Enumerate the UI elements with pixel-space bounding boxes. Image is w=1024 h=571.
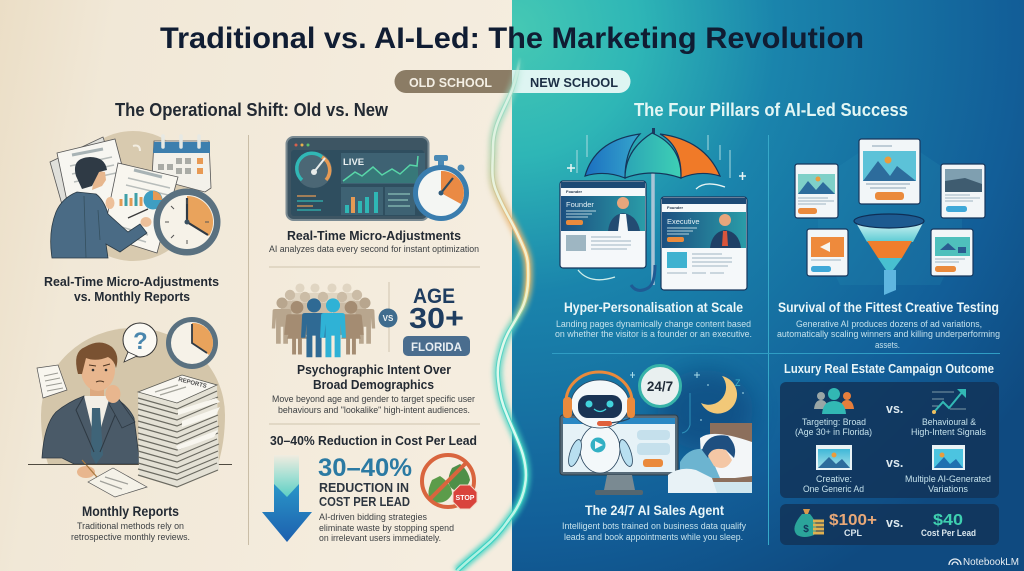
vs badge: VS <box>383 314 394 323</box>
panel: targeting and creative comparison: (Age 30+ in Florida) <box>795 427 872 437</box>
text: psychographic intent <box>272 362 475 415</box>
text: real-time vs monthly reports <box>44 274 219 304</box>
ad card: right <box>941 164 985 218</box>
icon: money bag and coins: $ <box>803 524 809 535</box>
text: monthly reports: Traditional methods rely on <box>77 521 184 531</box>
text: ai-driven bidding: on irrelevant users immediately. <box>319 533 441 543</box>
text: ai-driven bidding: eliminate waste by stopping spend <box>319 523 454 533</box>
panel: cost per lead comparison: $40 <box>933 512 963 529</box>
text: hyper-personalisation: Landing pages dynamically change content based <box>556 319 751 329</box>
icon: live dashboard with stopwatch <box>286 137 469 221</box>
age 30+ florida label: 30+ <box>409 303 464 335</box>
panel: cost per lead comparison <box>780 504 999 545</box>
panel: cost per lead comparison: Cost Per Lead <box>921 528 976 538</box>
sleeping person <box>668 423 752 493</box>
panel: targeting and creative comparison: Creative: <box>816 474 852 484</box>
panel: cost per lead comparison: vs. <box>886 516 903 530</box>
icon: money bag and coins <box>794 509 824 537</box>
live chart <box>341 153 425 184</box>
browser: founder: Founder <box>566 200 594 209</box>
icon: ai robot sales agent and sleeping person: Z <box>735 378 741 388</box>
panel: targeting and creative comparison: One Generic Ad <box>803 484 864 494</box>
icon: rising chart <box>932 389 966 414</box>
text: real-time micro-adjustments: Real-Time Micro-Adjustments <box>287 228 461 243</box>
text: 24/7 sales agent <box>562 503 746 542</box>
icon: people <box>814 388 854 414</box>
icon: man reviewing reports with clock and calendar <box>50 131 220 261</box>
monitor <box>560 415 678 495</box>
loose document <box>37 365 67 398</box>
old school pill: OLD SCHOOL <box>409 75 492 90</box>
robot <box>563 372 635 473</box>
gauge <box>296 152 332 188</box>
heading: four pillars: The Four Pillars of AI-Led Success <box>634 100 908 120</box>
paper stack <box>138 375 220 487</box>
text: ai-driven bidding <box>319 512 454 543</box>
title: Traditional vs. AI-Led: The Marketing Revolution <box>160 22 864 55</box>
browser: executive <box>661 197 747 290</box>
icon: generic ad image <box>816 445 852 470</box>
24/7 clock: 24/7 <box>647 379 673 394</box>
text: monthly reports: retrospective monthly reviews. <box>71 532 190 542</box>
text: psychographic intent: Move beyond age and gender to target specific user <box>272 394 475 404</box>
browser: executive: Founder <box>667 205 683 210</box>
icon: no money stop sign: STOP <box>456 495 475 502</box>
panel: targeting and creative comparison: Targeting: Broad <box>802 417 866 427</box>
browser: founder: Founder <box>566 189 582 194</box>
notebooklm watermark: NotebookLM <box>963 556 1019 568</box>
icon: ad variations flowing into a funnel <box>795 139 985 295</box>
text: real-time vs monthly reports: vs. Monthly Reports <box>74 289 190 304</box>
text: 24/7 sales agent: Intelligent bots trained on business data qualify <box>562 521 746 531</box>
moon <box>701 376 737 414</box>
icon: confused man with stack of reports <box>28 317 232 497</box>
paper stack: REPORTS <box>178 377 207 390</box>
text: hyper-personalisation <box>555 300 752 339</box>
text: survival of the fittest <box>777 300 1000 350</box>
bars <box>341 187 383 215</box>
speech bubble <box>123 323 157 362</box>
person from behind <box>51 157 151 258</box>
text: survival of the fittest: automatically scaling winners and killing underperforming <box>777 329 1000 339</box>
man <box>42 342 140 484</box>
browser: executive: Executive <box>667 217 700 226</box>
text: 30-40% reduction <box>318 454 412 509</box>
text: survival of the fittest: assets. <box>875 340 900 350</box>
text: monthly reports: Monthly Reports <box>82 504 179 519</box>
vs badge <box>378 282 398 352</box>
text: survival of the fittest: Generative AI produces dozens of ad variations, <box>796 319 982 329</box>
text: 30-40% reduction: 30–40% <box>318 454 412 482</box>
panel: targeting and creative comparison: Variations <box>928 484 969 494</box>
icon: ai variation image <box>932 445 965 470</box>
clock <box>166 317 218 369</box>
icon: down arrow <box>262 455 312 542</box>
paper on desk <box>88 468 147 497</box>
icon: crowd with two highlighted people <box>272 283 375 357</box>
icon: live dashboard with stopwatch: LIVE <box>343 157 364 168</box>
text: real-time vs monthly reports: Real-Time Micro-Adjustments <box>44 274 219 289</box>
old school pill <box>394 70 512 93</box>
heading: cost per lead reduction: 30–40% Reduction in Cost Per Lead <box>270 433 477 448</box>
icon: umbrella over personalised landing pages <box>560 128 747 290</box>
text: psychographic intent: behaviours and "lookalike" high-intent audiences. <box>278 405 470 415</box>
24/7 clock <box>640 366 680 406</box>
ad card: lower right <box>931 229 973 276</box>
report with charts <box>103 163 178 253</box>
ad card: left <box>795 164 838 218</box>
panel: targeting and creative comparison: Multiple AI-Generated <box>905 474 991 484</box>
icon: ai robot sales agent and sleeping person <box>560 366 753 495</box>
text: 30-40% reduction: REDUCTION IN <box>319 481 409 495</box>
text: psychographic intent: Broad Demographics <box>313 377 434 392</box>
panel: cost per lead comparison: CPL <box>844 528 863 538</box>
funnel <box>854 214 924 295</box>
panel: cost per lead comparison: $100+ <box>829 512 877 529</box>
text: ai-driven bidding: AI-driven bidding strategies <box>319 512 427 522</box>
text: monthly reports <box>71 504 190 542</box>
heading: campaign outcome: Luxury Real Estate Campaign Outcome <box>784 362 994 376</box>
clock <box>154 188 220 256</box>
age 30+ florida label: FLORIDA <box>411 340 462 354</box>
new school pill: NEW SCHOOL <box>530 75 618 90</box>
panel: targeting and creative comparison: Behavioural & <box>922 417 976 427</box>
ad card: lower left <box>807 229 848 276</box>
text: 30-40% reduction: COST PER LEAD <box>319 495 410 509</box>
browser: founder <box>560 181 646 268</box>
flowing divider ribbon <box>457 57 528 571</box>
text: real-time micro-adjustments: AI analyzes data every second for instant optimization <box>269 244 479 254</box>
panel: targeting and creative comparison: vs. <box>886 402 903 416</box>
age 30+ florida label <box>403 285 470 356</box>
heading: operational shift: The Operational Shift: Old vs. New <box>115 100 389 120</box>
text: hyper-personalisation: on whether the visitor is a founder or an executive. <box>555 329 752 339</box>
text: 24/7 sales agent: leads and book appointments while you sleep. <box>564 532 743 542</box>
text: 24/7 sales agent: The 24/7 AI Sales Agent <box>585 503 724 518</box>
ad card: top <box>859 139 920 204</box>
stopwatch <box>413 155 469 221</box>
new school pill <box>512 70 630 93</box>
text: hyper-personalisation: Hyper-Personalisation at Scale <box>564 300 743 315</box>
speech bubble: ? <box>133 328 148 355</box>
calendar <box>152 136 211 192</box>
panel: targeting and creative comparison: High-Intent Signals <box>911 427 986 437</box>
text: psychographic intent: Psychographic Intent Over <box>297 362 451 377</box>
text: real-time micro-adjustments <box>269 228 479 254</box>
panel grid lines <box>248 135 1000 545</box>
panel: targeting and creative comparison: vs. <box>886 456 903 470</box>
age 30+ florida label: AGE <box>413 285 455 308</box>
panel: targeting and creative comparison <box>780 382 999 498</box>
text: survival of the fittest: Survival of the Fittest Creative Testing <box>778 300 999 315</box>
icon: no money stop sign <box>422 455 477 509</box>
